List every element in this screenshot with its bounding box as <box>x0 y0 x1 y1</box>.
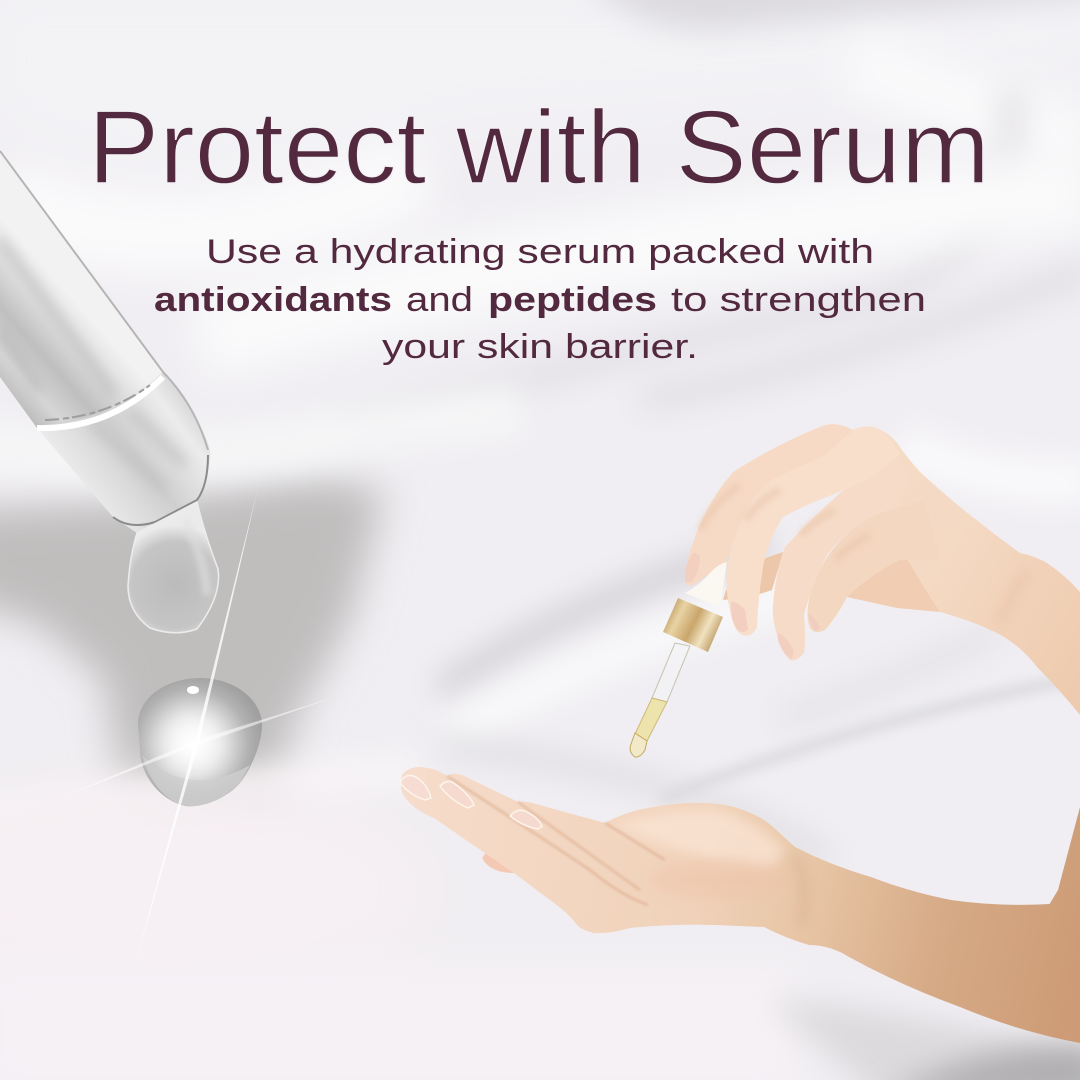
pipette glass body <box>0 151 211 533</box>
palm highlight <box>612 810 785 870</box>
serum droplet with sparkle <box>60 488 335 965</box>
thumb behind dropper <box>723 552 783 600</box>
serum meniscus line <box>37 377 163 428</box>
body text: peptides <box>488 281 657 319</box>
drop highlight <box>185 520 207 595</box>
palm under fingers <box>840 545 940 612</box>
upper hand holding dropper <box>685 424 1080 715</box>
droplet lower band <box>142 755 250 806</box>
body text: Use a hydrating serum packed with <box>206 233 874 271</box>
ring fingernail <box>778 633 794 659</box>
body text: your skin barrier. <box>382 328 698 366</box>
lower open hand and forearm <box>400 767 1080 1043</box>
fingernail one <box>400 775 431 800</box>
fingernail three <box>510 810 542 829</box>
droplet body <box>138 678 262 806</box>
wrist shading <box>1000 570 1030 625</box>
hidden pinky finger <box>482 840 530 873</box>
body text: and <box>406 281 473 319</box>
finger separation lines <box>447 776 665 905</box>
hanging serum drop <box>128 502 219 633</box>
body text <box>154 233 926 366</box>
fingernail two <box>440 781 474 808</box>
pipette tip rim <box>113 455 208 525</box>
pinky finger <box>808 500 940 632</box>
wrist crease shadow <box>795 855 805 925</box>
title: Protect with Serum <box>88 90 990 206</box>
serum gray streaks <box>90 410 185 490</box>
palm pink shading <box>650 860 790 900</box>
white bulb <box>685 562 727 607</box>
gold dropper <box>630 562 727 757</box>
ring finger <box>773 460 910 660</box>
upper empty tube <box>0 151 163 428</box>
meniscus dark detail <box>45 385 150 420</box>
glass pipette with serum <box>0 151 219 633</box>
droplet glow <box>165 712 225 772</box>
middle fingernail <box>731 602 748 632</box>
horizontal sparkle ray <box>60 697 335 798</box>
vertical sparkle ray <box>135 488 258 965</box>
serum oil in stem <box>635 698 667 741</box>
knuckle shading <box>700 485 870 560</box>
tube outer edge <box>0 151 208 450</box>
droplet highlight <box>187 686 199 694</box>
body text: to strengthen <box>671 281 926 319</box>
index fingernail <box>685 553 700 582</box>
tube gray streaks <box>0 240 115 395</box>
body text: antioxidants <box>154 281 392 319</box>
pinky fingernail <box>809 613 820 631</box>
dropper tip <box>630 733 647 757</box>
index finger <box>685 424 853 586</box>
gold collar <box>663 598 723 652</box>
hand silhouette <box>401 767 1080 1043</box>
back of hand <box>870 428 1080 715</box>
dropper glass stem <box>652 643 690 702</box>
forearm behind edge <box>1040 807 1080 920</box>
middle finger <box>726 426 900 636</box>
